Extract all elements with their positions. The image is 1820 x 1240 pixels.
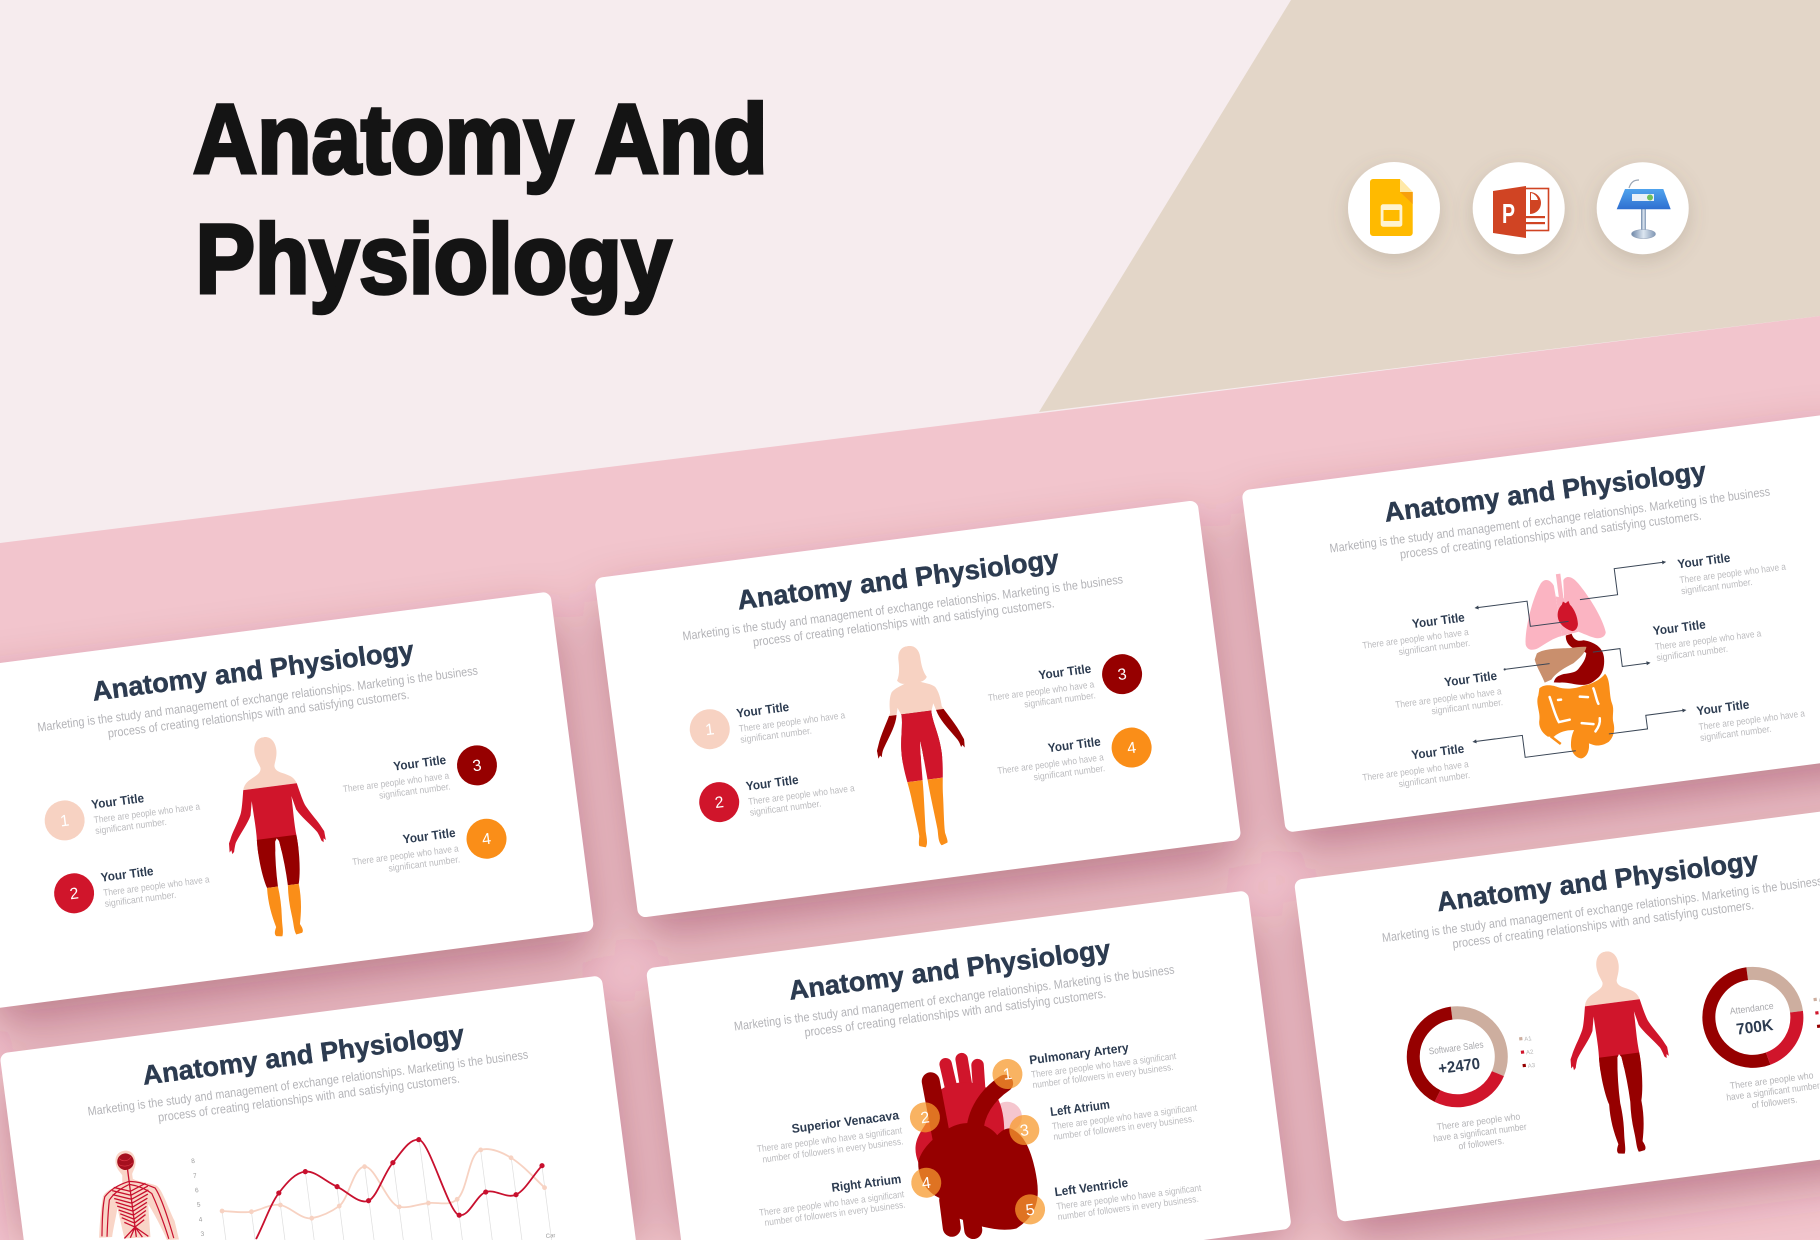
organs illustration (1517, 569, 1621, 764)
connector arrows (1452, 560, 1690, 764)
slide title: Anatomy and Physiology (1435, 846, 1760, 917)
label bottom right: There are people who have a (1698, 708, 1806, 733)
label: left ventricle: number of followers in every business. (1057, 1194, 1199, 1223)
slide subtitle (1329, 485, 1773, 570)
item 3: 3 (472, 757, 483, 775)
slide subtitle (733, 963, 1177, 1048)
label: superior venacava: number of followers in every business. (762, 1136, 904, 1166)
item 4: There are people who have a (997, 752, 1105, 777)
label middle left (1392, 668, 1504, 722)
label top right: Your Title (1677, 551, 1731, 571)
item 4: There are people who have a (352, 843, 460, 868)
label top left: Your Title (1411, 610, 1466, 631)
item 1 (42, 783, 203, 843)
donut: attendance: Attendance (1729, 1001, 1774, 1017)
label: left ventricle: There are people who have a significant (1056, 1183, 1202, 1213)
heart illustration (905, 1052, 1043, 1240)
series: light (216, 1140, 547, 1233)
icon: powerpoint (1473, 162, 1565, 254)
label: left atrium: Left Atrium (1049, 1097, 1111, 1119)
legend left: A1 (1524, 1036, 1533, 1043)
item 2: 2 (69, 885, 80, 903)
donut: software sales (1408, 1007, 1507, 1106)
label middle right: significant number. (1656, 644, 1729, 664)
series: dark red (246, 1121, 550, 1240)
label: left atrium: number of followers in every business. (1053, 1114, 1195, 1143)
slide subtitle: process of creating relationships with and satisfying customers. (1399, 509, 1702, 562)
item 2: There are people who have a (748, 783, 856, 808)
slide title: Anatomy and Physiology (787, 934, 1112, 1006)
item 3: There are people who have a (342, 771, 450, 795)
slide subtitle: process of creating relationships with and satisfying customers. (107, 688, 410, 741)
marker 4: 4 (921, 1175, 932, 1193)
panel: slide 5 heart (646, 890, 1292, 1240)
marker 1 (991, 1057, 1024, 1091)
item 3: significant number. (1024, 690, 1096, 710)
item 3 (985, 652, 1145, 715)
item 1: Your Title (90, 791, 145, 812)
slide subtitle: process of creating relationships with and satisfying customers. (752, 596, 1055, 649)
caption left: There are people who (1436, 1111, 1521, 1133)
item 3: 3 (1117, 666, 1128, 684)
item 3: There are people who have a (987, 679, 1096, 704)
male figure (229, 737, 326, 936)
legend right (1813, 996, 1820, 1031)
slide title: Anatomy and Physiology (90, 635, 416, 707)
item 4 (994, 725, 1154, 788)
label middle left: Your Title (1443, 669, 1498, 689)
panel: slide 6 donut charts (1294, 802, 1820, 1222)
caption left (1431, 1111, 1529, 1156)
donut: attendance: 700K (1735, 1017, 1775, 1039)
item 4: significant number. (1033, 763, 1106, 783)
item 1 (687, 692, 848, 752)
label bottom right: significant number. (1700, 724, 1772, 744)
panel: slide 3 internal organs (1241, 412, 1820, 833)
slide title: Anatomy and Physiology (1383, 456, 1708, 528)
liver (1534, 645, 1590, 683)
label: pulmonary artery: number of followers in every business. (1032, 1062, 1174, 1091)
item 2: Your Title (100, 864, 154, 885)
slide subtitle: Marketing is the study and management of exchange relationships. Marketing is the business (87, 1048, 529, 1119)
female figure (877, 646, 965, 848)
marker 3 (1007, 1113, 1041, 1147)
y axis labels: 4 (198, 1216, 203, 1224)
item 4 (349, 816, 509, 879)
item 1: significant number. (740, 726, 813, 746)
label bottom left: significant number. (1398, 770, 1471, 790)
label bottom right: Your Title (1696, 697, 1750, 718)
marker 5 (1013, 1193, 1047, 1226)
label: superior venacava: There are people who have a significant (756, 1125, 903, 1155)
y axis labels: 6 (195, 1187, 199, 1194)
label middle left: There are people who have a (1395, 686, 1503, 711)
label middle right: There are people who have a (1654, 628, 1763, 653)
panel: beige corner background (1039, 0, 1820, 412)
intestines (1534, 673, 1619, 763)
panel: slide 1 body map (0, 591, 594, 1009)
item 4: Your Title (402, 826, 456, 846)
label bottom left (1359, 741, 1471, 795)
y axis labels: 5 (196, 1201, 201, 1209)
item 4: 4 (1126, 740, 1137, 758)
caption right (1724, 1070, 1820, 1114)
legend left: A2 (1526, 1050, 1534, 1057)
label: pulmonary artery: Pulmonary Artery (1028, 1041, 1129, 1067)
slide title: Anatomy and Physiology (735, 544, 1061, 615)
panel: pink background band (0, 316, 1820, 1240)
y axis labels: 8 (191, 1158, 196, 1165)
marker 2 (908, 1101, 942, 1134)
legend left: A3 (1527, 1063, 1536, 1070)
item 1: Your Title (736, 700, 790, 721)
y axis labels: 7 (193, 1173, 198, 1180)
item 4: Your Title (1047, 735, 1102, 755)
y axis labels (191, 1158, 205, 1238)
slide title: Anatomy and Physiology (141, 1019, 466, 1091)
label: pulmonary artery: There are people who have a significant (1031, 1051, 1177, 1081)
donut: attendance (1704, 968, 1802, 1067)
caption right: There are people who (1729, 1070, 1814, 1092)
icon: keynote (1597, 162, 1689, 254)
legend left (1519, 1036, 1536, 1071)
label: superior venacava: Superior Venacava (791, 1108, 901, 1136)
label: right atrium: number of followers in every business. (764, 1200, 906, 1229)
label: right atrium: Right Atrium (831, 1172, 902, 1195)
item 3: significant number. (378, 781, 451, 802)
label top right: There are people who have a (1679, 562, 1787, 586)
slide subtitle (682, 572, 1126, 658)
item 1: 1 (59, 812, 70, 830)
item 2: 2 (714, 794, 725, 812)
y axis labels: 3 (200, 1231, 205, 1238)
label bottom right (1696, 690, 1808, 744)
donut: software sales: +2470 (1437, 1056, 1481, 1078)
label middle left: significant number. (1431, 697, 1504, 717)
label: left ventricle: Left Ventricle (1054, 1176, 1129, 1199)
slide subtitle (87, 1048, 531, 1133)
heart (1556, 600, 1579, 633)
marker 1: 1 (1002, 1066, 1013, 1084)
item 1: There are people who have a (738, 710, 846, 735)
item 2: Your Title (745, 773, 799, 793)
slide subtitle: Marketing is the study and management of exchange relationships. Marketing is the business (37, 664, 479, 735)
item 4: 4 (481, 831, 492, 849)
label: right atrium (756, 1172, 906, 1229)
label middle right (1652, 610, 1764, 664)
label top left: significant number. (1398, 638, 1471, 658)
item 3: Your Title (393, 753, 447, 774)
male figure (1570, 952, 1669, 1154)
label middle right: Your Title (1652, 617, 1706, 638)
main title (193, 84, 768, 314)
slide subtitle (37, 664, 481, 749)
label top left: There are people who have a (1362, 627, 1470, 652)
slide subtitle: Marketing is the study and management of exchange relationships. Marketing is the business (682, 572, 1124, 643)
item 4: significant number. (388, 854, 461, 875)
slide subtitle: process of creating relationships with and satisfying customers. (804, 987, 1107, 1040)
icon: google slides (1348, 162, 1440, 254)
item 2 (697, 765, 857, 825)
item 1: There are people who have a (93, 801, 201, 826)
stomach (1548, 630, 1607, 689)
caption left: of followers. (1458, 1136, 1505, 1152)
donut: software sales: Software Sales (1428, 1039, 1484, 1058)
item 1: 1 (704, 721, 715, 739)
x axis label: Car (546, 1233, 556, 1240)
label: superior venacava (754, 1108, 904, 1166)
caption right: of followers. (1751, 1095, 1798, 1111)
main title: Anatomy And (193, 84, 768, 194)
label bottom left: There are people who have a (1362, 759, 1470, 784)
label bottom left: Your Title (1411, 742, 1465, 762)
icon: powerpoint: P (1502, 198, 1515, 229)
marker 4 (909, 1166, 943, 1200)
main title: Physiology (196, 204, 672, 314)
lungs (1517, 569, 1607, 651)
item 1: significant number. (95, 817, 167, 837)
label: left atrium (1049, 1086, 1199, 1143)
label top right: significant number. (1680, 577, 1753, 597)
line chart (191, 1113, 556, 1240)
label top left (1360, 610, 1471, 663)
item 2: significant number. (749, 799, 822, 819)
item 2: significant number. (104, 890, 177, 910)
marker 2: 2 (920, 1109, 931, 1127)
item 2: There are people who have a (103, 874, 211, 899)
slide subtitle: Marketing is the study and management of exchange relationships. Marketing is the business (733, 963, 1175, 1034)
marker 3: 3 (1019, 1122, 1030, 1140)
label: left atrium: There are people who have a significant (1051, 1103, 1198, 1132)
label: pulmonary artery (1028, 1035, 1178, 1091)
item 2 (52, 856, 212, 916)
slide subtitle: process of creating relationships with and satisfying customers. (1452, 898, 1755, 951)
item 3: Your Title (1038, 662, 1092, 682)
item 3 (340, 743, 500, 806)
label: right atrium: There are people who have a significant (759, 1189, 905, 1219)
caption left: have a significant number (1433, 1122, 1527, 1145)
panel: slide 2 female body map (594, 500, 1241, 918)
label top right (1677, 544, 1789, 597)
panel: slide 4 nervous system chart (0, 975, 636, 1240)
slide subtitle: process of creating relationships with and satisfying customers. (157, 1072, 460, 1125)
marker 5: 5 (1025, 1202, 1036, 1220)
label: left ventricle (1054, 1166, 1204, 1223)
nervous system figure (88, 1145, 179, 1240)
